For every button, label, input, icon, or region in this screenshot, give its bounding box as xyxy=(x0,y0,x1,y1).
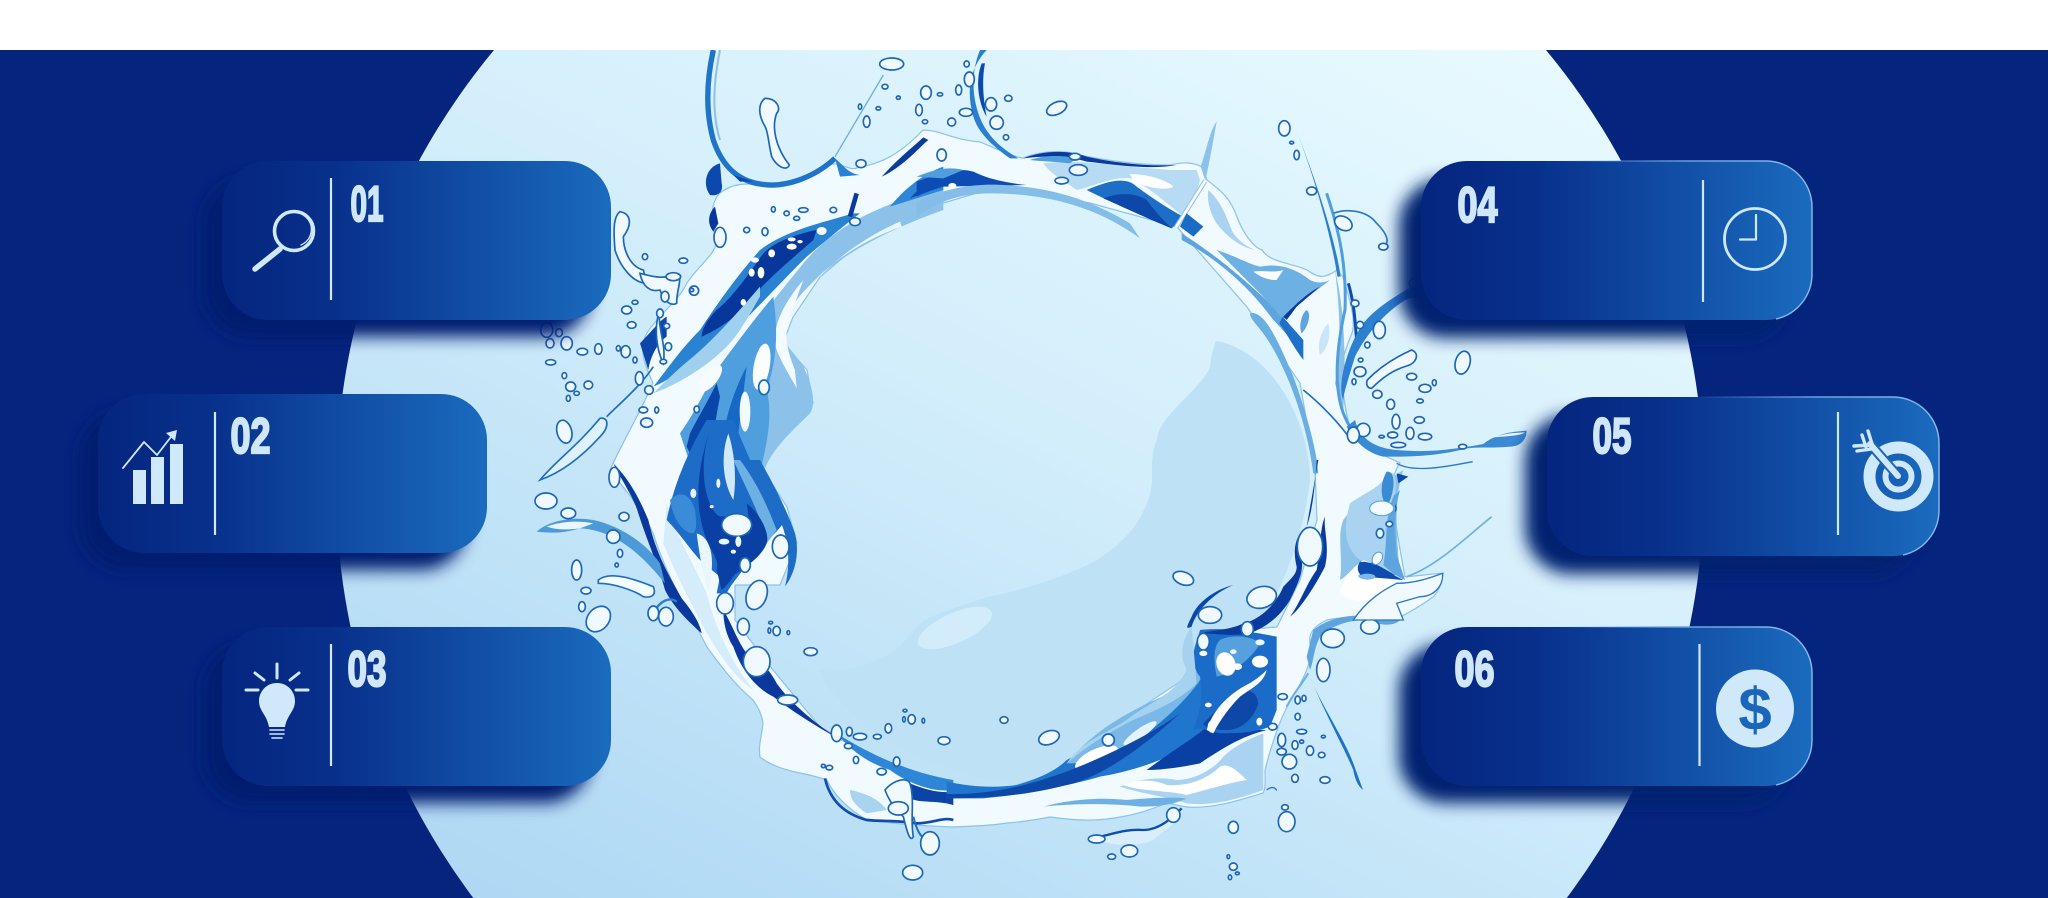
icon: rising bar chart xyxy=(123,430,183,504)
card 02 xyxy=(80,394,487,570)
water ring: lower right quadrant xyxy=(947,460,1403,845)
icon: dollar coin xyxy=(1716,670,1794,748)
water ring: upper right quadrant xyxy=(917,50,1353,473)
droplets: upper right xyxy=(937,61,1317,195)
number 05: 05 xyxy=(1592,408,1632,464)
card 04 xyxy=(1399,161,1812,338)
bubble inner shading xyxy=(818,341,1310,785)
water ring: lower left quadrant xyxy=(537,420,953,840)
icon: target with arrow xyxy=(1854,431,1928,506)
droplets: lower left xyxy=(535,467,950,880)
water ring xyxy=(535,50,1527,880)
number 04: 04 xyxy=(1458,177,1498,233)
droplets: upper left xyxy=(541,58,931,445)
light circle xyxy=(336,50,1704,898)
icon: clock xyxy=(1724,208,1786,270)
droplets: right branch xyxy=(1332,213,1473,566)
droplets: lower right xyxy=(1000,501,1396,880)
card 06 xyxy=(1399,627,1812,803)
number 01: 01 xyxy=(350,176,384,232)
card 05 xyxy=(1525,397,1939,574)
icon: dollar coin: $ xyxy=(1738,676,1772,743)
number 02: 02 xyxy=(230,408,270,464)
icon: magnifying glass xyxy=(255,212,314,269)
number 06: 06 xyxy=(1454,641,1494,697)
water ring: continuous base silhouette xyxy=(610,130,1443,827)
water ring: right branch xyxy=(1327,193,1527,620)
icon: light bulb xyxy=(246,664,308,738)
number 03: 03 xyxy=(348,641,386,697)
water ring: upper left quadrant xyxy=(540,50,943,480)
card 01 xyxy=(204,161,611,337)
card 03 xyxy=(204,627,611,803)
